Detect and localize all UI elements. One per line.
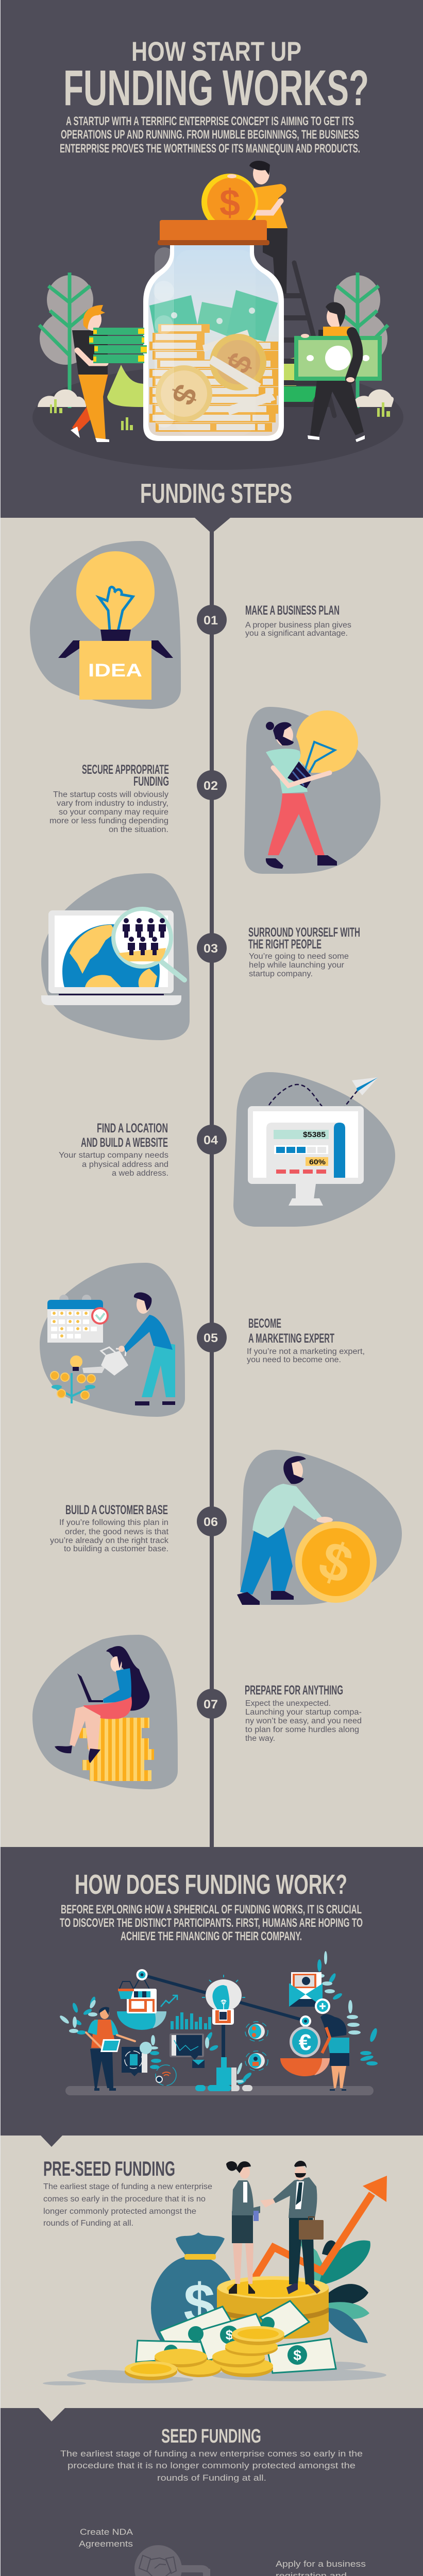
icon: woman on coins on blob	[32, 1635, 178, 1789]
icon: right pan with euro coin: €	[299, 2030, 311, 2055]
icon: plant leaves behind jar	[107, 355, 320, 407]
step 02 text: The startup costs will obviously	[53, 790, 168, 799]
icon: round badges	[245, 2022, 268, 2071]
figure: woman at right pan	[320, 2014, 349, 2091]
step 02 text	[49, 790, 168, 834]
tree trunk	[203, 2569, 210, 2576]
step 06	[50, 1450, 402, 1605]
chart: branching tree of seed tasks	[48, 2528, 376, 2576]
badge 04	[197, 1125, 227, 1155]
step 02 heading	[82, 762, 169, 789]
icon: jar lid	[158, 220, 269, 245]
branch: create NDA agreements: Create NDA	[80, 2528, 133, 2537]
step 05 text	[247, 1347, 365, 1364]
step 03 text	[249, 952, 349, 978]
heading: pre-seed funding: PRE-SEED FUNDING	[43, 2158, 175, 2180]
bar chart	[171, 2012, 211, 2029]
icon: tablet with line chart	[170, 2033, 205, 2068]
step 02 heading: FUNDING	[133, 774, 169, 789]
icon: stack of cash	[89, 328, 147, 363]
paragraph: how does funding work	[60, 1903, 363, 1943]
step 07 text: Expect the unexpected.	[245, 1699, 331, 1708]
step 03 heading	[248, 925, 360, 952]
jar contents: large coins: $	[164, 379, 204, 410]
step 01 text: you a significant advantage.	[245, 629, 348, 638]
figure: man with tablet	[86, 2007, 135, 2091]
paragraph: seed funding: rounds of Funding at all.	[157, 2473, 266, 2483]
step 04 text: a physical address and	[82, 1160, 168, 1169]
step 02 text: more or less funding depending	[49, 817, 168, 825]
step 07 heading: PREPARE FOR ANYTHING	[245, 1683, 343, 1698]
icon: rising arrow	[253, 2194, 372, 2280]
step 05 text: you need to become one.	[247, 1355, 341, 1364]
figure: right man carrying banknote	[294, 302, 382, 442]
icon: left tree	[39, 273, 93, 408]
paragraph: pre-seed funding	[43, 2182, 212, 2228]
badge 06	[197, 1506, 227, 1536]
step 01 text: A proper business plan gives	[245, 621, 351, 630]
icon: laptop, globe and magnifier on blob	[41, 873, 190, 1040]
icon: envelope with banknote	[289, 1972, 330, 2014]
panel: funding steps timeline	[0, 518, 423, 1847]
icon: man pushing coin on blob	[237, 1450, 402, 1605]
badge 02	[197, 770, 227, 800]
icon: banknote	[294, 336, 382, 381]
illustration: handshake on stacks of coins and money	[43, 2161, 387, 2385]
panel: how does funding work	[0, 1847, 423, 2136]
icon: monitor dashboard on blob	[233, 1072, 395, 1227]
icon: stacked coins	[217, 2276, 329, 2339]
badge 02: 02	[204, 779, 218, 793]
step 06 text: you’re already on the right track	[50, 1536, 168, 1545]
icon: monitor dashboard on blob: $5385	[303, 1130, 326, 1139]
paragraph: pre-seed funding: longer commonly protected amongst the	[43, 2207, 196, 2216]
icon: dollar coin: $	[312, 1530, 360, 1596]
badge 06: 06	[204, 1515, 218, 1529]
branch: create NDA agreements	[79, 2528, 207, 2576]
icon: document card and wifi	[122, 2042, 176, 2086]
icon: note seals	[164, 2317, 307, 2365]
figure: gardener	[119, 1292, 175, 1405]
jar contents: large coins: $	[220, 348, 260, 379]
paragraph: seed funding: The earliest stage of funding a new enterprise comes so early in the	[60, 2449, 363, 2459]
step 06 heading: BUILD A CUSTOMER BASE	[65, 1503, 168, 1517]
badge 01	[197, 605, 227, 635]
icon: balance beam and stand	[142, 1975, 305, 2091]
step 06 text: to building a customer base.	[64, 1545, 168, 1553]
step 07 text: Launching your startup compa-	[245, 1708, 362, 1717]
step 03 text: You’re going to need some	[249, 952, 349, 961]
figure: business man	[260, 2161, 324, 2294]
badge 01: 01	[204, 614, 218, 628]
paragraph: pre-seed funding: The earliest stage of funding a new enterprise	[43, 2182, 212, 2191]
heading: seed funding: SEED FUNDING	[161, 2426, 261, 2447]
illustration: jar of money with three people	[32, 161, 403, 470]
step 02	[49, 707, 381, 874]
branch: business and trademark registration	[207, 2560, 376, 2576]
timeline spine	[210, 531, 214, 1847]
intro paragraph	[60, 114, 360, 156]
step 02 heading: SECURE APPROPRIATE	[82, 762, 169, 777]
jar contents: coin stacks	[149, 324, 278, 432]
panel: pre-seed funding	[0, 2136, 423, 2408]
arrow: notch into timeline	[195, 518, 230, 532]
step 07 text: ny won’t be easy, and you need	[245, 1717, 362, 1725]
step 06 text	[50, 1518, 169, 1553]
icon: monitor dashboard on blob: 60%	[309, 1158, 326, 1166]
icon: plants	[59, 1951, 378, 2086]
icon: ladder	[281, 263, 334, 416]
step 03	[41, 873, 360, 1040]
icon: idea box on blob: IDEA	[88, 660, 142, 681]
step 03 text: startup company.	[249, 970, 313, 978]
figure: man on ladder holding coin	[201, 161, 287, 294]
badge 03: 03	[204, 942, 218, 956]
icon: note seals: $	[293, 2347, 301, 2363]
panel: header background	[0, 0, 423, 518]
step 04 text: Your startup company needs	[59, 1151, 168, 1160]
badge 05: 05	[204, 1331, 218, 1345]
icon: money bag: $	[183, 2273, 215, 2336]
step 05 text: If you’re not a marketing expert,	[247, 1347, 365, 1356]
ground shadows	[43, 2362, 386, 2385]
branch: business and trademark registration: Apply for a business	[276, 2560, 366, 2569]
step 07 text: to plan for some hurdles along	[245, 1725, 359, 1734]
icon: right pan with euro coin	[280, 2015, 330, 2076]
step 05 heading: A MARKETING EXPERT	[248, 1331, 334, 1346]
step 05 heading: BECOME	[248, 1316, 281, 1331]
jar contents: large coins	[156, 330, 276, 422]
step 03 text: help while launching your	[249, 961, 344, 970]
icon: money plant	[50, 1355, 95, 1403]
step 02 text: on the situation.	[109, 825, 168, 834]
paragraph: how does funding work: ACHIEVE THE FINANCING OF THEIR COMPANY.	[121, 1929, 302, 1943]
icon: calendar	[47, 1295, 108, 1343]
illustration: balance scale of funding participants	[59, 1951, 378, 2095]
step 07 text: the way.	[245, 1734, 275, 1743]
step 04	[59, 1072, 395, 1227]
step 04 text: a web address.	[112, 1169, 168, 1178]
figure: man on ladder holding coin: $	[219, 182, 240, 224]
icon: jar	[143, 245, 284, 441]
paragraph: pre-seed funding: comes so early in the procedure that it is no	[43, 2195, 206, 2204]
paragraph: pre-seed funding: rounds of Funding at all.	[43, 2219, 133, 2228]
step 05 heading	[248, 1316, 334, 1346]
step 07 text	[245, 1699, 362, 1743]
panel: seed funding	[0, 2408, 423, 2576]
step 01 text	[245, 621, 351, 638]
badge 07: 07	[204, 1698, 218, 1711]
icon: leaves	[298, 2240, 370, 2343]
icon: man watering money plant on blob	[40, 1263, 185, 1417]
figure: left man carrying cash	[71, 305, 147, 442]
step 03 heading: THE RIGHT PEOPLE	[248, 937, 322, 952]
icon: watering can	[82, 1347, 128, 1376]
step 06 text: order, the good news is that	[65, 1528, 169, 1536]
step 04 heading: FIND A LOCATION	[97, 1121, 168, 1136]
badge 05	[197, 1323, 227, 1352]
icon: right tree	[334, 273, 388, 408]
icon: idea box on blob	[30, 541, 181, 709]
branch: create NDA agreements: Agreements	[79, 2539, 133, 2549]
icon: money bag	[151, 2232, 238, 2361]
icon: light bulb on stand	[202, 1975, 245, 2025]
step 07	[32, 1635, 362, 1789]
step 04 text	[59, 1151, 168, 1178]
paragraph: seed funding	[60, 2449, 363, 2483]
icon: note seals: $	[226, 2327, 233, 2343]
icon: banknotes	[136, 2301, 336, 2373]
figure: business woman	[226, 2161, 260, 2294]
icon: left pan with shop	[117, 1969, 177, 2030]
step 05	[40, 1263, 365, 1417]
step 01 heading: MAKE A BUSINESS PLAN	[245, 603, 340, 618]
step 04 heading: AND BUILD A WEBSITE	[81, 1136, 168, 1150]
badge 03	[197, 933, 227, 963]
icon: arrow head	[363, 2176, 387, 2202]
arrow: notch	[41, 2136, 62, 2147]
icon: small coin piles	[125, 2326, 284, 2380]
icon: bushes and grass	[38, 389, 394, 430]
icon: man carrying light bulb on blob	[244, 707, 381, 874]
jar contents: banknotes	[149, 290, 278, 342]
paragraph: seed funding: procedure that it is no longer commonly protected amongst the	[67, 2461, 356, 2470]
icon: dollar coin	[295, 1521, 377, 1603]
icon: jar highlights	[154, 247, 256, 435]
heading: funding steps: FUNDING STEPS	[140, 478, 292, 509]
badge 07	[197, 1689, 227, 1719]
step 06 text: If you’re following this plan in	[59, 1518, 168, 1527]
title line one: HOW START UP	[131, 37, 301, 67]
badge 04: 04	[204, 1133, 218, 1147]
arrow: notch	[39, 2408, 65, 2421]
step 02 text: vary from industry to industry,	[57, 799, 168, 808]
step 04 heading	[81, 1121, 168, 1150]
step 02 text: so your company may require	[59, 808, 168, 817]
step 01	[30, 541, 351, 709]
